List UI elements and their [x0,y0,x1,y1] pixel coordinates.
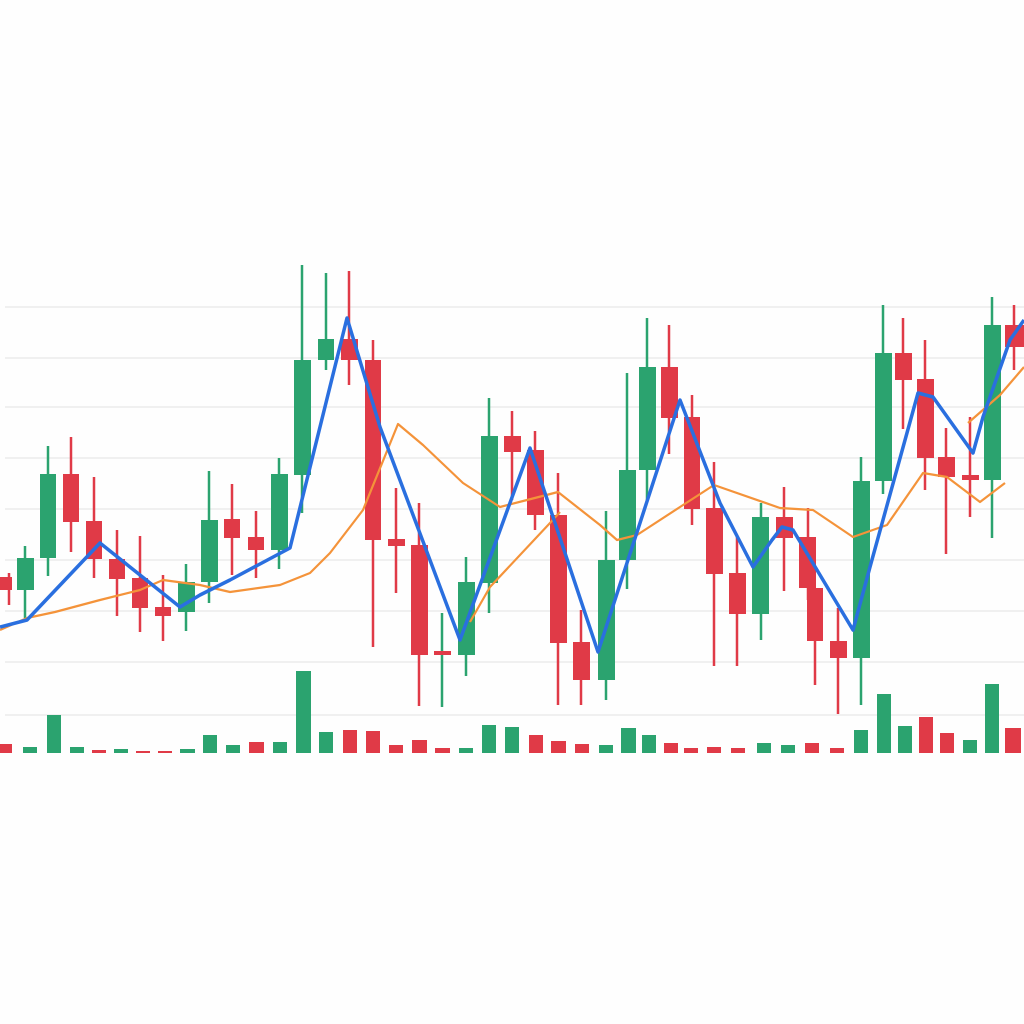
candles: bodies [0,325,1024,680]
candles: wicks [9,265,1014,714]
orange moving average line [0,367,1024,630]
blue price line [0,318,1024,652]
volume bars [0,671,1021,753]
